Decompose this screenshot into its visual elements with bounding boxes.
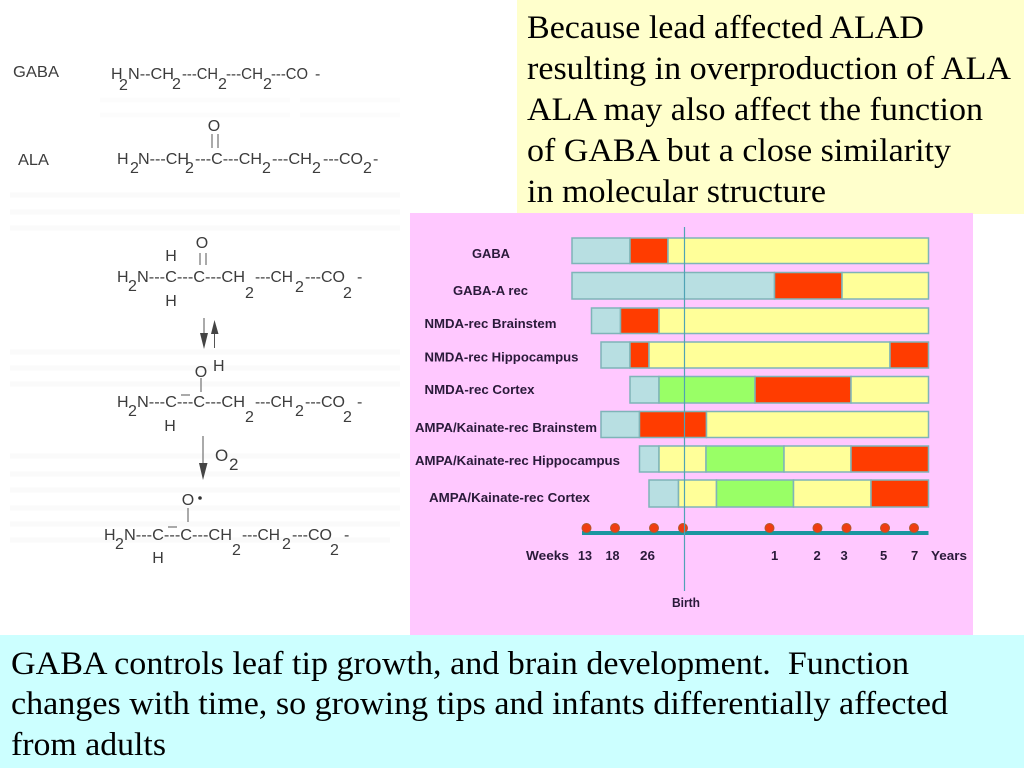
enol form structure: H [164, 418, 176, 435]
keto form structure: H [117, 269, 129, 286]
GABA structure: ---CH [226, 66, 263, 83]
panel: GABA summary: GABA controls leaf tip growth, and brain development. Function [11, 646, 909, 682]
bar labels: AMPA/Kainate-rec Brainstem [415, 420, 597, 435]
keto form structure: N---C---C---CH [137, 269, 245, 286]
panel: GABA summary: from adults [11, 727, 166, 763]
GABA structure: 2 [218, 76, 227, 93]
radical form structure: 2 [232, 542, 241, 559]
ALA structure: ALA [18, 152, 49, 169]
timeline labels: 26 [640, 548, 655, 563]
radical form structure: H [152, 550, 164, 567]
timeline labels: 2 [814, 548, 821, 563]
GABA structure: N--CH [128, 66, 174, 83]
ALA structure: N---CH [138, 151, 189, 168]
radical form structure: - [344, 527, 349, 544]
GABA structure: - [315, 66, 320, 83]
panel: lead and ALA explanation: resulting in overproduction of ALA [527, 51, 1011, 87]
keto form structure: - [357, 269, 362, 286]
enol form structure: H [117, 394, 129, 411]
ALA structure: ---CO [323, 151, 363, 168]
panel: receptor development chart [410, 213, 973, 635]
bar labels: GABA-A rec [453, 283, 528, 298]
bar labels: NMDA-rec Brainstem [424, 316, 556, 331]
GABA structure: H [111, 66, 123, 83]
timeline labels: 7 [911, 548, 918, 563]
panel: lead and ALA explanation: Because lead affected ALAD [527, 10, 924, 46]
bar labels [415, 246, 620, 505]
radical form structure: 2 [330, 542, 339, 559]
keto form structure: H [165, 248, 177, 265]
radical form structure: N---C---C---CH [124, 527, 232, 544]
keto form structure: 2 [343, 285, 352, 302]
keto form structure: 2 [245, 285, 254, 302]
icon: equilibrium arrows [200, 318, 218, 349]
icon: oxygen reaction arrow [199, 436, 238, 480]
ALA structure: 2 [312, 160, 321, 177]
enol form structure: ---CO [305, 394, 345, 411]
panel: lead and ALA explanation [517, 0, 1024, 214]
timeline labels [526, 548, 967, 610]
GABA structure: 2 [172, 76, 181, 93]
radical form structure: ---CO [292, 527, 332, 544]
panel: molecular structures [13, 64, 378, 567]
timeline labels: 5 [880, 548, 887, 563]
bars: development stages [572, 238, 928, 507]
GABA structure: ---CH [182, 66, 218, 83]
GABA structure: 2 [263, 76, 272, 93]
enol form structure: ---CH [255, 394, 293, 411]
ALA structure: - [373, 151, 378, 168]
GABA structure: 2 [119, 77, 128, 94]
keto form structure: O [196, 235, 208, 252]
keto form structure: H [165, 293, 177, 310]
radical form structure: ---CH [242, 527, 280, 544]
enol form structure: 2 [295, 403, 304, 420]
ALA structure: 2 [130, 160, 139, 177]
timeline labels: Weeks [526, 548, 569, 563]
timeline labels: 1 [771, 548, 778, 563]
radical form structure: H [104, 527, 116, 544]
ALA structure [18, 118, 378, 177]
enol form structure: N---C---C---CH [137, 394, 245, 411]
bar labels: GABA [472, 246, 511, 261]
ALA structure: ---C---CH [195, 151, 262, 168]
panel: GABA summary [0, 635, 1024, 768]
radical form structure: O [182, 492, 194, 509]
bar labels: AMPA/Kainate-rec Hippocampus [415, 453, 620, 468]
enol form structure: O [195, 364, 207, 381]
panel: GABA summary: changes with time, so growing tips and infants differentially affected [11, 686, 949, 722]
radical form structure: 2 [115, 536, 124, 553]
bar labels: NMDA-rec Cortex [424, 382, 535, 397]
enol form structure [117, 358, 362, 435]
icon: oxygen reaction arrow: O [215, 446, 228, 465]
bar labels: NMDA-rec Hippocampus [424, 350, 578, 364]
keto form structure: ---CO [305, 269, 345, 286]
ALA structure: 2 [185, 160, 194, 177]
GABA structure: ---CO [271, 66, 308, 83]
timeline labels: 18 [606, 548, 620, 563]
radical form structure: 2 [282, 536, 291, 553]
enol form structure: 2 [245, 409, 254, 426]
timeline labels: Birth [672, 595, 700, 610]
GABA structure [13, 64, 320, 94]
birth marker line [684, 227, 686, 591]
ALA structure: O [208, 118, 220, 135]
enol form structure: - [357, 394, 362, 411]
enol form structure: 2 [343, 409, 352, 426]
ALA structure: 2 [262, 160, 271, 177]
timeline labels: Years [931, 548, 967, 563]
panel: lead and ALA explanation: of GABA but a close similarity [527, 133, 952, 169]
timeline axis [582, 524, 928, 535]
icon: oxygen reaction arrow: 2 [229, 455, 238, 474]
keto form structure: ---CH [255, 269, 293, 286]
timeline labels: 3 [840, 548, 848, 563]
ALA structure: ---CH [272, 151, 312, 168]
keto form structure: 2 [295, 279, 304, 296]
radical form structure [104, 492, 349, 567]
ALA structure: H [117, 151, 129, 168]
ALA structure: 2 [363, 160, 372, 177]
GABA structure: GABA [13, 64, 59, 81]
timeline labels: 13 [578, 548, 592, 563]
panel: lead and ALA explanation: ALA may also affect the function [527, 92, 983, 128]
bar labels: AMPA/Kainate-rec Cortex [429, 490, 591, 505]
keto form structure: 2 [128, 278, 137, 295]
panel: lead and ALA explanation: in molecular structure [527, 174, 826, 210]
enol form structure: 2 [128, 403, 137, 420]
keto form structure [117, 235, 362, 310]
enol form structure: H [213, 358, 225, 375]
